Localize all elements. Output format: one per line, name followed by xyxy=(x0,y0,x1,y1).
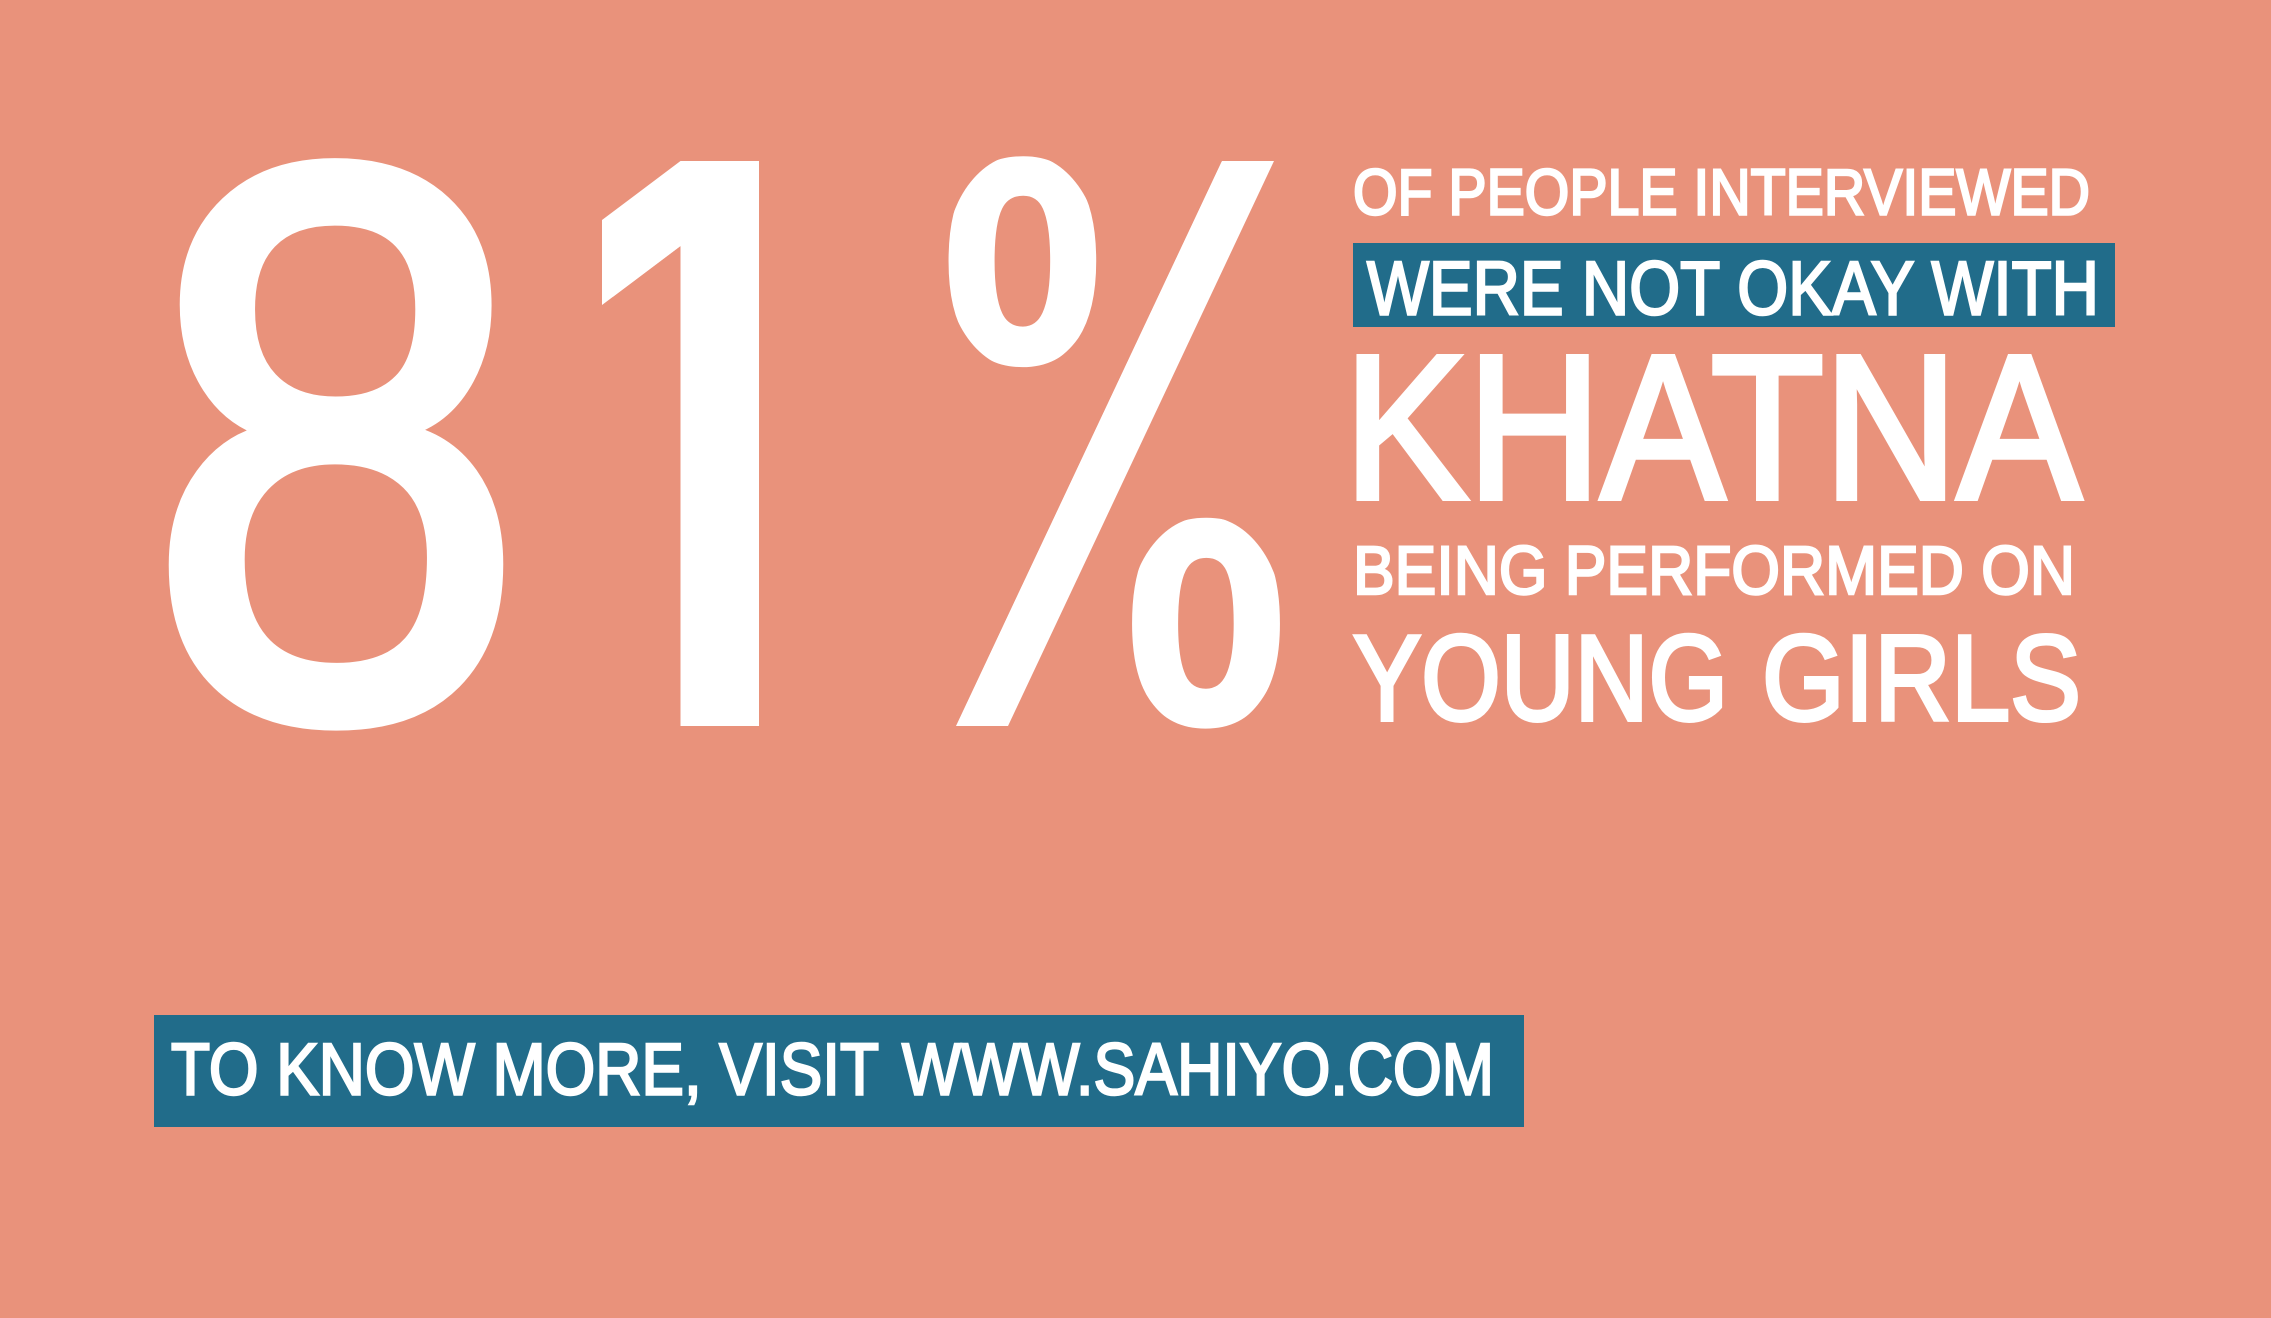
footer banner: call to action: TO KNOW MORE, VISIT xyxy=(171,1030,879,1110)
big statistic: 81%: 1 xyxy=(561,0,861,900)
text: young girls xyxy=(1353,610,2081,746)
big statistic: 81%: % xyxy=(850,0,1370,900)
footer banner: call to action: WWW.SAHIYO.COM xyxy=(902,1030,1494,1110)
text: being performed on: BEING PERFORMED ON xyxy=(1353,532,2075,609)
text: young girls: GIRLS xyxy=(1762,610,2081,746)
big statistic: 81%: % xyxy=(908,316,1288,813)
big statistic: 81%: % xyxy=(941,71,1321,568)
text: young girls: YOUNG xyxy=(1353,610,1728,746)
text: of people interviewed: OF PEOPLE INTERVIEWED xyxy=(1353,156,2090,228)
highlighted banner: were not okay with: WERE NOT OKAY WITH xyxy=(1367,246,2099,332)
footer banner: call to action xyxy=(154,1015,1524,1127)
infographic canvas xyxy=(154,156,2115,1127)
big statistic: 81%: 8 xyxy=(146,3,526,882)
heading: khatna: KHATNA xyxy=(1344,313,2081,542)
big statistic: 81% xyxy=(146,0,1370,900)
